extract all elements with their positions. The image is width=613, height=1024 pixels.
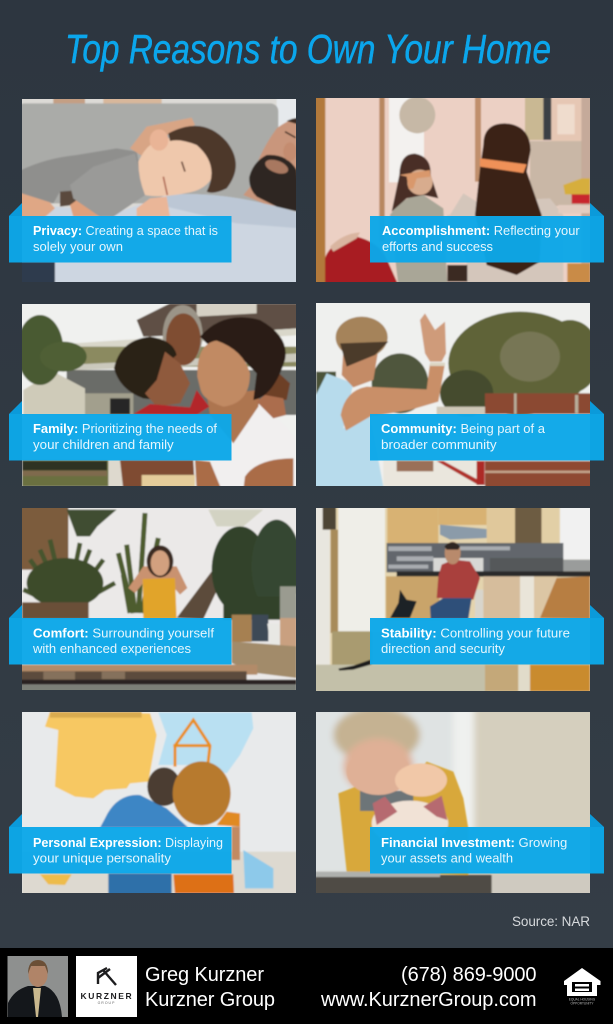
panel: accomplishment (310, 95, 604, 288)
ribbon: financial investment: your assets and wealth (381, 850, 513, 866)
ribbon: personal expression (9, 814, 232, 874)
ribbon: financial investment (370, 814, 604, 874)
contact details: (678) 869-9000 (401, 964, 536, 986)
panel: comfort (9, 503, 303, 693)
ribbon: family (9, 401, 232, 460)
contact details: www.KurznerGroup.com (320, 989, 536, 1011)
caption: family: Family: Prioritizing the needs of (33, 421, 217, 436)
caption: privacy: Privacy: Creating a space that is (33, 223, 218, 238)
footer bar (0, 948, 613, 1024)
ribbon: accomplishment: efforts and success (382, 239, 493, 254)
panel: financial investment (307, 705, 604, 898)
caption: accomplishment: Accomplishment: Reflecting your (382, 223, 580, 238)
agent name and company (145, 964, 275, 1011)
icon: K house mark (98, 968, 116, 985)
icon: equal housing opportunity: OPPORTUNITY (571, 1002, 594, 1006)
agent headshot (8, 956, 68, 1017)
panel: privacy (9, 95, 303, 288)
caption: community: Community: Being part of a (381, 421, 546, 436)
ribbon: personal expression: your unique personality (33, 850, 172, 866)
ribbon: stability (370, 605, 604, 664)
Kurzner Group logo: GROUP (98, 1001, 115, 1005)
panel: community (310, 300, 604, 490)
ribbon: community (370, 401, 604, 460)
ribbon: privacy (9, 203, 232, 262)
caption: stability: Stability: Controlling your future (381, 626, 570, 640)
caption: comfort: Comfort: Surrounding yourself (33, 626, 214, 640)
panel: personal expression (9, 705, 303, 898)
ribbon: privacy: solely your own (33, 239, 123, 254)
agent name and company: Kurzner Group (145, 989, 275, 1011)
ribbon: comfort (9, 605, 232, 664)
photo: woman with headphones among plants (22, 508, 296, 690)
photo: children playing superheroes (310, 95, 597, 288)
photo: father and sleeping son (17, 95, 303, 288)
caption: financial investment: Financial Investment: Growing (381, 835, 567, 850)
contact details (320, 964, 536, 1011)
photo: couple looking at painted wall (22, 712, 296, 893)
caption: personal expression: Personal Expression: Displaying (33, 835, 223, 850)
ribbon: accomplishment (370, 203, 604, 262)
photo: man in wheelchair in kitchen with dog (310, 503, 597, 696)
ribbon: comfort: with enhanced experiences (32, 641, 191, 656)
agent name and company: Greg Kurzner (145, 964, 264, 986)
ribbon: family: your children and family (33, 437, 174, 452)
source note: Source: NAR (512, 914, 590, 929)
icon: equal housing opportunity (564, 968, 600, 1006)
photo: child with piggy bank (316, 712, 590, 893)
icon: equal housing opportunity: EQUAL HOUSING (569, 998, 596, 1002)
ribbon: community: broader community (381, 437, 497, 452)
Kurzner Group logo (76, 956, 137, 1017)
ribbon: stability: direction and security (381, 641, 506, 656)
photo: mother and two children (22, 304, 296, 486)
panel: stability (310, 503, 604, 696)
panel: family (9, 300, 303, 490)
Kurzner Group logo: KURZNER (80, 991, 132, 1001)
photo: neighbor waving (310, 300, 600, 490)
